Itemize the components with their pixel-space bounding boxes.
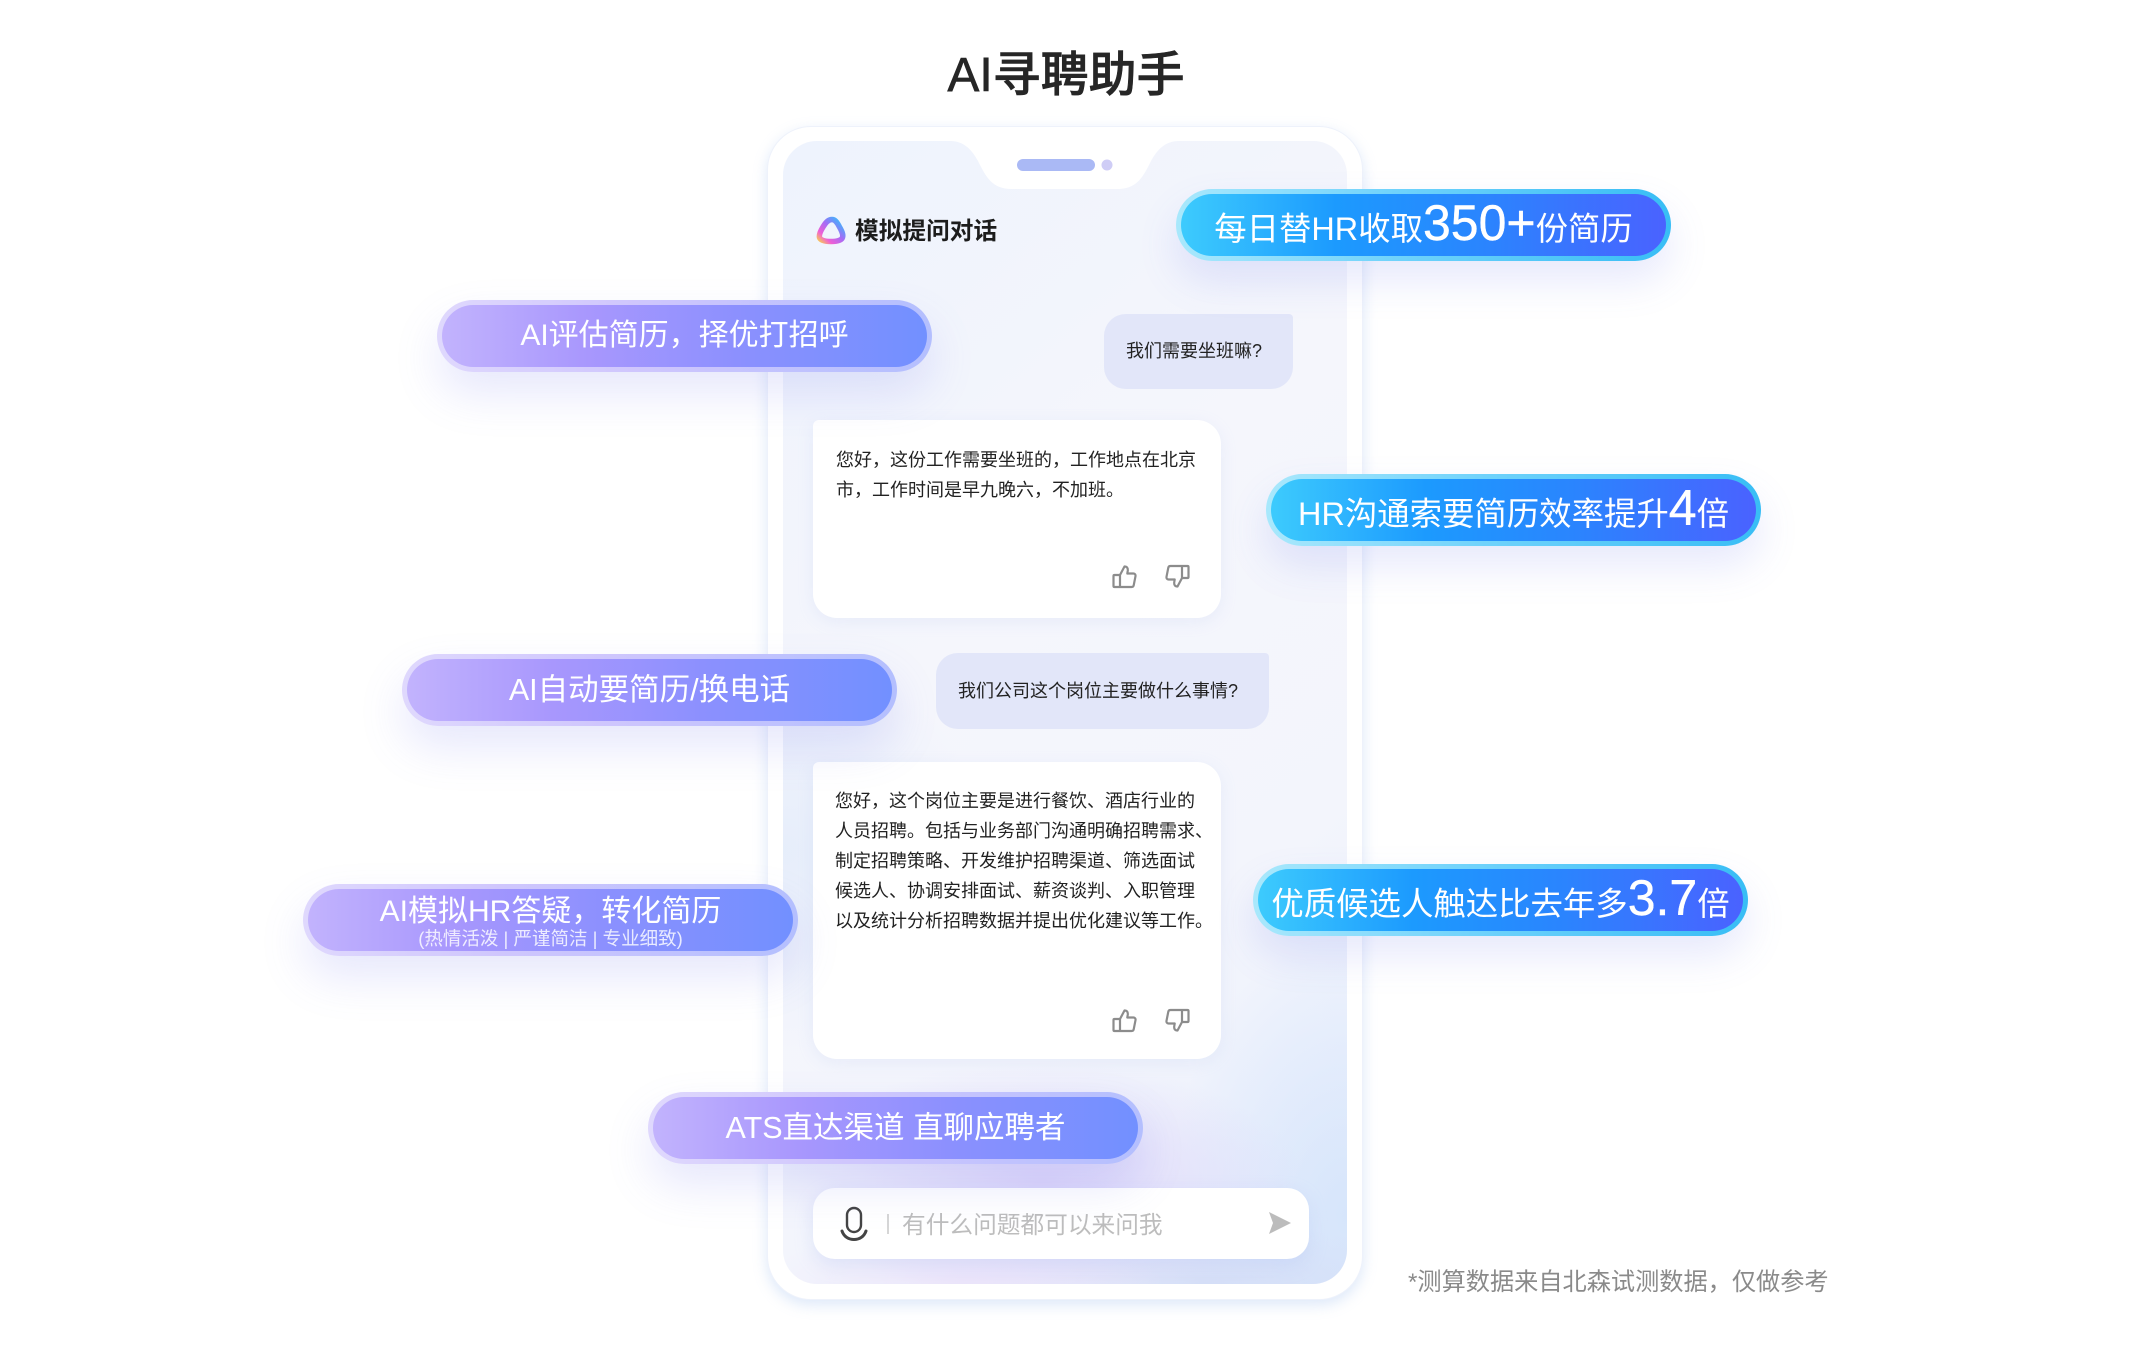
icon: thumb down — [1165, 1008, 1190, 1032]
callout: AI requests resumes: AI自动要简历/换电话 — [509, 673, 790, 707]
icon: thumb up — [1112, 565, 1137, 588]
icon: thumb up — [1112, 1009, 1137, 1032]
callout main text: AI模拟HR答疑，转化简历 — [380, 895, 721, 928]
panel: phone frame — [767, 126, 1363, 1300]
question bubble 2 — [936, 653, 1269, 729]
stat callout: 350+ resumes: 每日替HR收取350+份简历 — [1214, 195, 1633, 251]
answer bubble 2: 候选人、协调安排面试、薪资谈判、入职管理 — [835, 881, 1195, 901]
stat callout: 350+ resumes — [1176, 189, 1671, 261]
panel: phone screen — [783, 141, 1347, 1284]
footnote: *测算数据来自北森试测数据，仅做参考 — [1408, 1269, 1829, 1296]
callout sub text: (热情活泼 | 严谨简洁 | 专业细致) — [418, 928, 683, 949]
answer bubble 2 — [813, 762, 1221, 1059]
icon: send — [1269, 1212, 1291, 1234]
answer bubble 1: 市，工作时间是早九晚六，不加班。 — [836, 480, 1124, 500]
input separator — [887, 1214, 888, 1234]
callout: ATS — [648, 1092, 1143, 1164]
question bubble 1: 我们需要坐班嘛? — [1126, 341, 1262, 361]
app header text: 模拟提问对话 — [855, 219, 997, 245]
answer bubble 1 — [813, 420, 1221, 618]
stat callout: 3.7x reach: 优质候选人触达比去年多3.7倍 — [1271, 870, 1730, 926]
answer bubble 2: 人员招聘。包括与业务部门沟通明确招聘需求、 — [835, 821, 1213, 841]
callout: AI simulated HR — [303, 884, 798, 956]
input placeholder: 有什么问题都可以来问我 — [902, 1213, 1163, 1239]
notch with speaker and camera — [954, 141, 1174, 189]
answer bubble 2: 您好，这个岗位主要是进行餐饮、酒店行业的 — [835, 791, 1195, 811]
callout: AI requests resumes — [402, 654, 897, 726]
icon: microphone — [840, 1206, 868, 1241]
callout: ATS: ATS直达渠道 直聊应聘者 — [725, 1111, 1066, 1145]
app header — [816, 216, 997, 245]
stat callout: 4x efficiency — [1266, 474, 1761, 546]
callout: AI evaluates resumes: AI评估简历，择优打招呼 — [520, 319, 849, 352]
answer bubble 2: 制定招聘策略、开发维护招聘渠道、筛选面试 — [835, 851, 1195, 871]
icon: AI logo — [816, 216, 846, 244]
title: AI寻聘助手 — [947, 49, 1185, 102]
input bar — [813, 1188, 1309, 1259]
answer bubble 2: 以及统计分析招聘数据并提出优化建议等工作。 — [835, 911, 1213, 931]
stat callout: 4x efficiency: HR沟通索要简历效率提升4倍 — [1298, 480, 1729, 536]
callout: AI evaluates resumes — [437, 300, 932, 372]
answer bubble 1: 您好，这份工作需要坐班的，工作地点在北京 — [836, 450, 1196, 470]
question bubble 2: 我们公司这个岗位主要做什么事情? — [958, 681, 1238, 701]
question bubble 1 — [1104, 314, 1293, 389]
icon: thumb down — [1165, 564, 1190, 588]
